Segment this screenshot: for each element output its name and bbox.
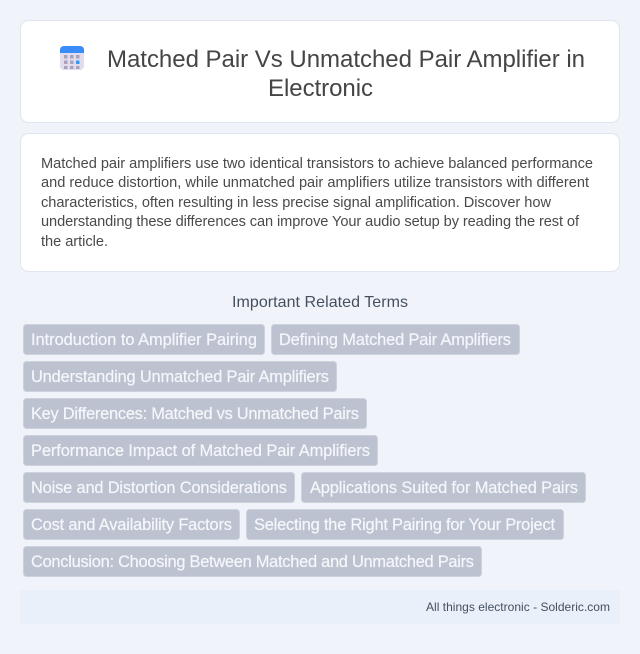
tag: Noise and Distortion Considerations: [31, 479, 287, 497]
tag: [24, 546, 482, 576]
tag: Understanding Unmatched Pair Amplifiers: [31, 368, 329, 386]
tag: [24, 436, 378, 466]
tag: [24, 362, 336, 392]
text block: description: and reduce distortion, while unmatched pair amplifiers utilize transistors with different: [41, 175, 589, 191]
tag: [272, 324, 520, 354]
tag: [24, 398, 366, 428]
title: Matched Pair Vs Unmatched Pair Amplifier in: [107, 46, 585, 73]
text block: description: [41, 156, 593, 250]
footer: All things electronic - Solderic.com: [426, 600, 610, 614]
text block: description: Matched pair amplifiers use two identical transistors to achieve balanced performance: [41, 156, 593, 172]
icon: calendar: [60, 46, 84, 70]
tag: Selecting the Right Pairing for Your Project: [254, 516, 555, 534]
text block: description: understanding these differences can improve Your audio setup by reading the rest of: [41, 214, 580, 230]
title: Electronic: [268, 75, 373, 102]
tag: [24, 510, 240, 540]
tag: Introduction to Amplifier Pairing: [31, 331, 257, 349]
text block: description: characteristics, often resulting in less precise signal amplification. Discover how: [41, 195, 551, 211]
title: [107, 46, 585, 102]
tag: [302, 472, 586, 502]
tag: Defining Matched Pair Amplifiers: [279, 331, 511, 349]
footer: [20, 590, 620, 624]
tag: Performance Impact of Matched Pair Amplifiers: [31, 442, 370, 460]
tag: [246, 510, 564, 540]
tag: Key Differences: Matched vs Unmatched Pairs: [31, 405, 359, 423]
tag: Conclusion: Choosing Between Matched and Unmatched Pairs: [31, 553, 474, 571]
tag: [24, 324, 264, 354]
tag: Applications Suited for Matched Pairs: [310, 479, 578, 497]
panel: description card: [20, 134, 620, 272]
heading: important related terms: Important Related Terms: [232, 294, 408, 311]
tag: [24, 472, 294, 502]
panel: title card: [20, 20, 620, 122]
tag list: [24, 324, 586, 576]
text block: description: the article.: [41, 234, 108, 250]
tag: Cost and Availability Factors: [31, 516, 232, 534]
